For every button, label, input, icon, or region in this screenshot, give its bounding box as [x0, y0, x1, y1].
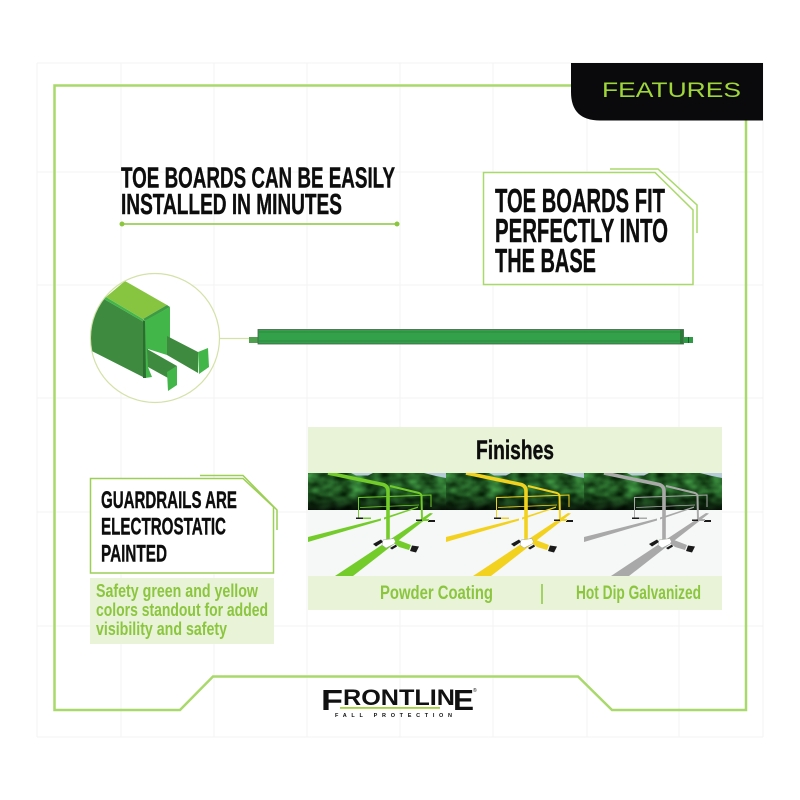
features tab: FEATURES	[602, 79, 741, 102]
photo: yellow guardrail	[446, 473, 584, 576]
logo: frontline: ®	[473, 687, 477, 694]
callout: guardrails painted: GUARDRAILS ARE	[101, 487, 237, 514]
hot dip galvanized label: Hot Dip Galvanized	[576, 583, 701, 604]
callout: toe boards fit: THE BASE	[495, 242, 596, 279]
safety colors note: visibility and safety	[96, 619, 227, 639]
logo: frontline: F	[321, 685, 343, 717]
heading: toe boards install	[120, 162, 400, 226]
callout: guardrails painted	[90, 476, 277, 573]
powder coating label: Powder Coating	[380, 583, 493, 604]
callout: toe boards fit: PERFECTLY INTO	[495, 212, 668, 249]
safety colors note: Safety green and yellow	[96, 581, 259, 601]
features tab	[571, 63, 763, 120]
logo: frontline: E	[453, 685, 474, 717]
toe board bar	[249, 330, 693, 344]
safety colors note	[90, 578, 274, 644]
finishes heading: Finishes	[476, 435, 554, 465]
icon: toe board end detail	[80, 274, 251, 402]
callout: toe boards fit	[484, 169, 697, 284]
heading: toe boards install: TOE BOARDS CAN BE EASILY	[121, 162, 395, 194]
logo: frontline: RONTLIN	[343, 685, 455, 710]
callout: guardrails painted: PAINTED	[101, 540, 167, 568]
heading: toe boards install: INSTALLED IN MINUTES	[121, 189, 342, 221]
safety colors note: colors standout for added	[96, 600, 268, 620]
logo: frontline	[321, 685, 477, 719]
photo: green guardrail	[308, 473, 446, 576]
panel: finishes	[308, 427, 722, 610]
callout: toe boards fit: TOE BOARDS FIT	[495, 182, 665, 219]
page frame outline	[54, 86, 746, 710]
callout: guardrails painted: ELECTROSTATIC	[101, 514, 226, 540]
logo: frontline: FALL PROTECTION	[335, 713, 452, 719]
photo: galvanized guardrail	[584, 473, 722, 576]
